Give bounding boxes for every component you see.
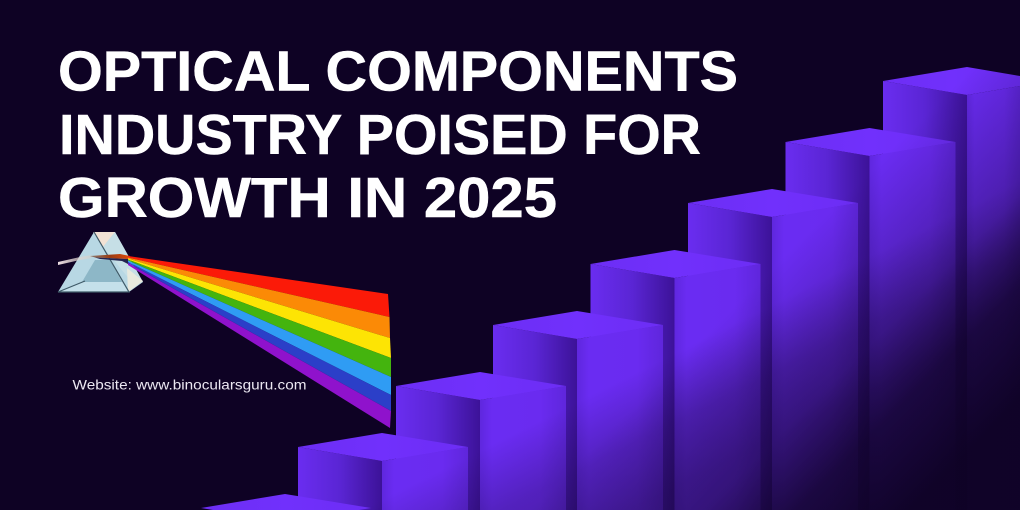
column 1 (201, 494, 371, 510)
column 8 (883, 67, 1020, 510)
title: OPTICAL COMPONENTS (58, 40, 738, 104)
column 4 (493, 311, 663, 510)
column 5 (590, 250, 760, 510)
column 3 (396, 372, 566, 510)
title (58, 40, 738, 230)
column 7 (786, 128, 956, 510)
icon: glass prism (58, 232, 143, 292)
title: GROWTH IN 2025 (58, 166, 557, 230)
column 2 (298, 433, 468, 510)
website text: Website: www.binocularsguru.com (72, 378, 306, 392)
rainbow beam (128, 256, 391, 428)
column 6 (688, 189, 858, 510)
title: INDUSTRY POISED FOR (59, 103, 701, 167)
